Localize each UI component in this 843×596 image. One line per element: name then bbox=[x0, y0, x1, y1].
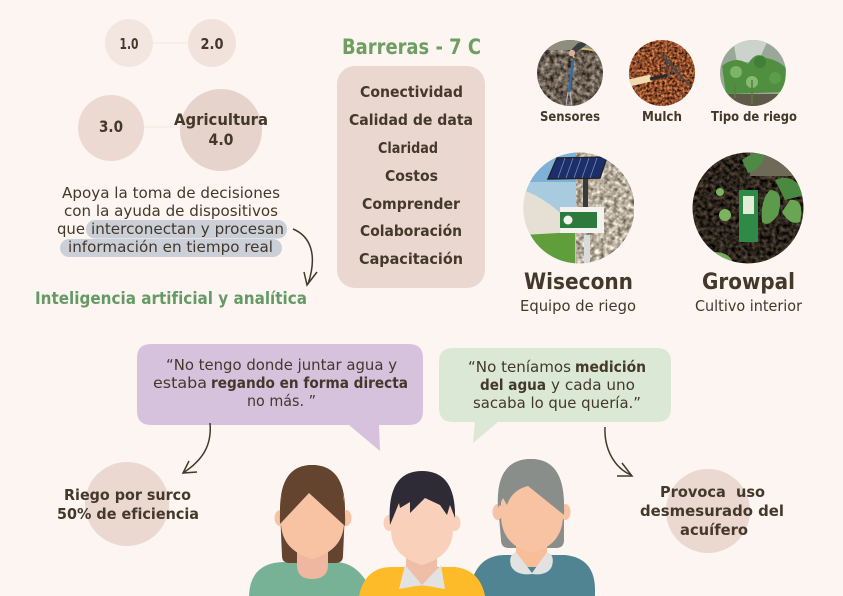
speech bubble: green quote: medición bbox=[575, 358, 646, 376]
person: grey-haired woman bbox=[472, 459, 595, 596]
description text block bbox=[57, 184, 287, 257]
speech bubble: purple quote: estaba bbox=[153, 374, 207, 392]
panel: barreras list: Conectividad bbox=[360, 83, 463, 101]
speech bubble: green quote: y cada uno bbox=[551, 376, 635, 394]
panel: barreras list: Costos bbox=[385, 167, 438, 185]
product: wiseconn: Wiseconn bbox=[524, 270, 633, 295]
person: black-haired man bbox=[359, 471, 485, 596]
version 1.0: 1.0 bbox=[120, 35, 138, 53]
Agricultura 4.0: 4.0 bbox=[208, 130, 234, 149]
photo: mulch: Mulch bbox=[642, 109, 682, 125]
callout: riego por surco: Riego por surco bbox=[64, 486, 191, 504]
product: growpal: Growpal bbox=[702, 270, 795, 295]
timeline: agriculture versions bbox=[78, 19, 268, 171]
photo: mulch bbox=[629, 40, 695, 125]
version 3.0 bbox=[78, 95, 144, 161]
product: wiseconn: Equipo de riego bbox=[520, 297, 636, 315]
callout: provoca uso desmesurado: Provoca uso bbox=[660, 483, 765, 501]
photo: tipo de riego bbox=[711, 40, 797, 125]
description text block: Apoya la toma de decisiones bbox=[62, 184, 280, 202]
product: wiseconn bbox=[520, 152, 636, 315]
panel: barreras list bbox=[337, 66, 485, 288]
version 1.0 bbox=[105, 19, 153, 67]
callout: riego por surco: 50% de eficiencia bbox=[57, 505, 199, 523]
heading: barreras: Barreras - 7 C bbox=[342, 35, 481, 59]
arrow: to provoca uso bbox=[605, 427, 632, 476]
callout: provoca uso desmesurado bbox=[640, 469, 784, 553]
arrow: to riego por surco bbox=[183, 423, 210, 473]
panel: barreras list: Colaboración bbox=[360, 222, 462, 240]
description text block: información en tiempo real bbox=[68, 238, 273, 256]
product: growpal bbox=[692, 152, 805, 315]
heading: inteligencia artificial: Inteligencia artificial y analítica bbox=[35, 289, 307, 309]
photo: tipo de riego: Tipo de riego bbox=[711, 109, 797, 125]
description text block: que bbox=[57, 220, 85, 238]
callout: provoca uso desmesurado: desmesurado del bbox=[640, 502, 784, 520]
speech bubble: purple quote: “No tengo donde juntar agua y bbox=[166, 356, 397, 374]
photo: sensores bbox=[537, 40, 603, 125]
speech bubble: purple quote bbox=[137, 344, 423, 451]
panel: barreras list: Claridad bbox=[378, 139, 438, 157]
speech bubble: purple quote: regando en forma directa bbox=[211, 374, 408, 392]
description text block: con la ayuda de dispositivos bbox=[64, 202, 278, 220]
panel: barreras list: Capacitación bbox=[359, 250, 463, 268]
callout: riego por surco bbox=[57, 462, 199, 546]
version 2.0 bbox=[188, 19, 236, 67]
speech bubble: green quote: sacaba lo que quería.” bbox=[473, 394, 641, 412]
callout: provoca uso desmesurado: acuífero bbox=[680, 521, 748, 539]
speech bubble: green quote bbox=[439, 348, 671, 443]
speech bubble: green quote: “No teníamos bbox=[468, 358, 571, 376]
speech bubble: purple quote: no más. ” bbox=[247, 392, 316, 410]
person: brown-haired woman bbox=[249, 465, 371, 596]
panel: barreras list: Comprender bbox=[362, 195, 460, 213]
photo: sensores: Sensores bbox=[540, 109, 600, 125]
version 2.0: 2.0 bbox=[200, 35, 224, 53]
speech bubble: green quote: del agua bbox=[480, 376, 546, 394]
product: growpal: Cultivo interior bbox=[695, 297, 803, 315]
arrow: to inteligencia artificial bbox=[293, 229, 317, 285]
Agricultura 4.0: Agricultura bbox=[174, 110, 268, 129]
version 3.0: 3.0 bbox=[99, 117, 123, 136]
panel: barreras list: Calidad de data bbox=[349, 111, 473, 129]
description text block: interconectan y procesan bbox=[91, 220, 284, 238]
Agricultura 4.0 bbox=[174, 89, 268, 171]
